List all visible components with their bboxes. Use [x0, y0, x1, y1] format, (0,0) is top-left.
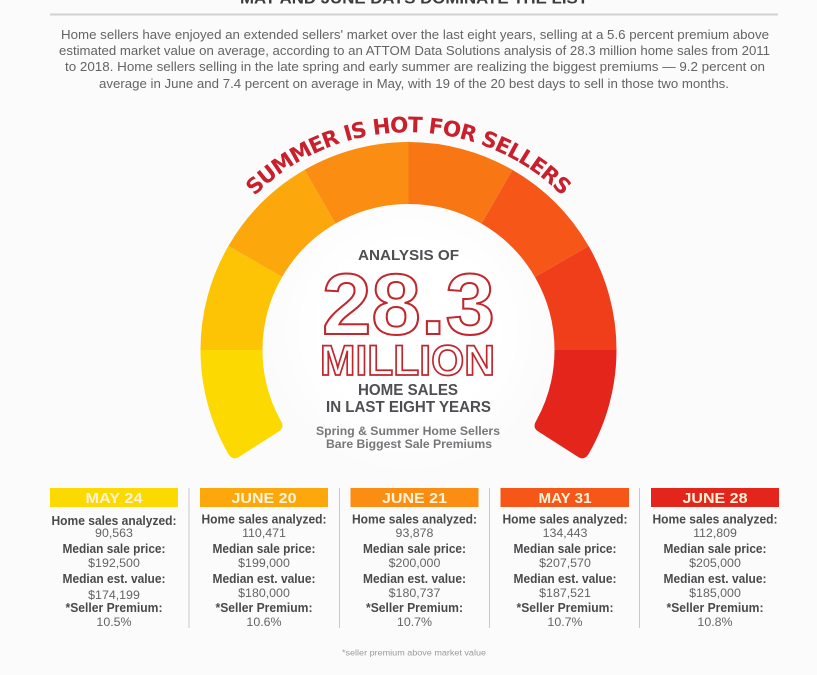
gauge: seven-colour arc [200, 142, 616, 458]
column: June 28: Median sale price: [664, 541, 766, 556]
intro paragraph: to 2018. Home sellers selling in the late spring and early summer are realizing the biggest premiums — 9.2 percent on [65, 60, 765, 74]
footnote: *seller premium above market value [342, 648, 487, 658]
column: June 21: Home sales analyzed: [352, 512, 477, 526]
column: June 28: $185,000 [689, 586, 741, 600]
column: June 20: Median est. value: [212, 571, 316, 586]
column: May 31: Home sales analyzed: [502, 512, 628, 526]
column: May 24: Home sales analyzed: [52, 513, 176, 528]
column: June 20: JUNE 20 [232, 490, 296, 507]
column: May 31: $207,570 [539, 556, 591, 570]
centre text: home sales [326, 382, 491, 416]
column: June 21: Median est. value: [363, 571, 466, 586]
column: May 31: Median sale price: [514, 541, 616, 556]
column: June 28: JUNE 28 [682, 490, 748, 507]
column: June 28: $205,000 [689, 556, 741, 570]
column: June 28 [651, 488, 779, 629]
column: May 24: Median sale price: [62, 541, 166, 556]
column: June 28: 10.8% [697, 615, 733, 629]
column: May 31: 10.7% [547, 615, 583, 629]
column: May 24: 90,563 [95, 526, 133, 540]
column: June 20: $180,000 [238, 586, 290, 600]
centre text: home sales: IN LAST EIGHT YEARS [326, 399, 491, 416]
centre word: million: MILLION [320, 337, 495, 385]
centre subtitle: Bare Biggest Sale Premiums [326, 437, 492, 451]
column: June 20: Median sale price: [212, 541, 316, 556]
column: June 20: $199,000 [238, 556, 290, 570]
column: May 24 [50, 488, 178, 629]
column: June 21: 93,878 [396, 526, 434, 540]
column: May 24: 10.5% [96, 615, 132, 629]
column: May 31: *Seller Premium: [516, 600, 614, 615]
column: May 24: *Seller Premium: [66, 600, 162, 615]
column: June 28: *Seller Premium: [666, 600, 764, 615]
centre text: home sales: HOME SALES [358, 382, 458, 399]
curved title: SUMMER IS HOT FOR SELLERS [246, 116, 572, 194]
intro paragraph [59, 28, 770, 91]
column: June 28: Home sales analyzed: [652, 512, 778, 526]
centre subtitle [316, 424, 500, 451]
column: June 21: $200,000 [389, 556, 440, 570]
centre subtitle: Spring & Summer Home Sellers [316, 424, 500, 438]
centre number: 28.3: 28.3 [322, 257, 495, 353]
column: May 24: MAY 24 [86, 490, 143, 507]
column: May 31: $187,521 [539, 586, 591, 600]
column: June 20: Home sales analyzed: [202, 512, 326, 526]
intro paragraph: estimated market value on average, according to an ATTOM Data Solutions analysis of 28.3 million home sales from 2011 [59, 44, 770, 58]
column: June 20: 10.6% [246, 615, 282, 629]
column: June 20: *Seller Premium: [216, 600, 312, 615]
column: May 24: $192,500 [88, 556, 140, 570]
column: June 28: 112,809 [693, 526, 737, 540]
column: May 31 [500, 488, 629, 629]
column: May 31: Median est. value: [514, 571, 616, 586]
column: June 21 [350, 488, 478, 629]
column: May 31: MAY 31 [538, 490, 592, 507]
intro paragraph: average in June and 7.4 percent on average in May, with 19 of the 20 best days to sell in those two months. [99, 77, 729, 91]
column: June 20 [200, 488, 328, 629]
column: June 20: 110,471 [242, 526, 286, 540]
column: June 21: $180,737 [389, 586, 440, 600]
intro paragraph: Home sellers have enjoyed an extended sellers' market over the last eight years, selling at a 5.6 percent premium above [61, 28, 769, 42]
column: May 31: 134,443 [543, 526, 587, 540]
column: May 24: $174,199 [88, 588, 140, 602]
column: June 21: 10.7% [397, 615, 432, 629]
centre text: analysis of: ANALYSIS OF [358, 247, 459, 264]
column: June 21: JUNE 21 [382, 490, 447, 507]
column: May 24: Median est. value: [62, 571, 166, 586]
column: June 21: *Seller Premium: [366, 600, 463, 615]
column: June 21: Median sale price: [363, 541, 466, 556]
column: June 28: Median est. value: [664, 571, 766, 586]
